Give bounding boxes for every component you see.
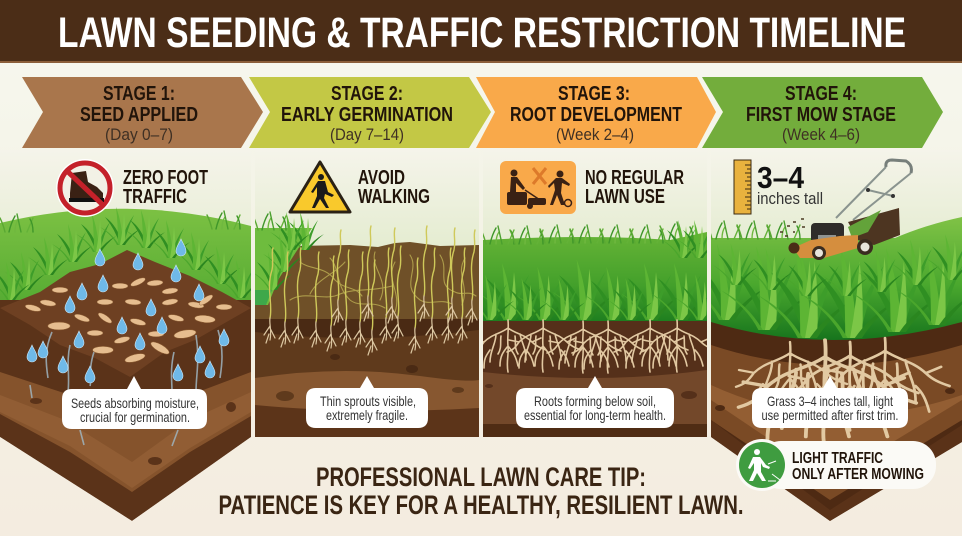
text: no regular lawn use: LAWN USE — [585, 186, 665, 208]
sprouts — [264, 226, 477, 355]
panel: stage 1 seed applied — [0, 201, 251, 521]
lawn — [483, 232, 707, 321]
soil layers — [483, 318, 707, 437]
panel: stage 2 early germination — [255, 190, 479, 437]
hill of grass — [0, 208, 251, 300]
text: professional tip — [218, 462, 744, 520]
water droplets — [27, 239, 229, 383]
badge: light traffic only after mowing: LIGHT TRAFFIC — [792, 450, 883, 467]
text: no regular lawn use — [585, 167, 684, 208]
grass tufts around soil — [0, 207, 260, 300]
lawn with hill — [711, 217, 962, 340]
grass fringe — [481, 220, 718, 258]
icon: no regular lawn use — [500, 161, 576, 214]
icon: no foot traffic sign — [56, 159, 114, 217]
stage 4 arrow header: STAGE 4: — [785, 83, 857, 105]
soil layers — [711, 315, 962, 525]
text: professional tip: PATIENCE IS KEY FOR A HEALTHY, RESILIENT LAWN. — [218, 490, 744, 520]
icon: avoid walking warning sign — [290, 162, 350, 212]
stage 2 arrow header: EARLY GERMINATION — [281, 104, 453, 126]
text: 3-4 inches tall: inches tall — [757, 189, 823, 208]
water trails — [30, 330, 222, 446]
text: avoid walking — [358, 167, 430, 208]
callout: stage 2 caption: Thin sprouts visible, — [320, 393, 416, 409]
soil layers — [255, 316, 483, 437]
callout: stage 3 caption: Roots forming below soil, — [534, 393, 656, 409]
stage 2 arrow header: (Day 7–14) — [330, 125, 404, 144]
text: 3-4 inches tall: 3–4 — [757, 160, 805, 195]
icon: ruler — [734, 160, 751, 214]
stage 2 arrow header: STAGE 2: — [331, 83, 403, 105]
text: 3-4 inches tall — [757, 160, 823, 208]
stage 2 arrow header — [249, 77, 491, 148]
callout: stage 4 caption: use permitted after first trim. — [762, 407, 898, 423]
callout: stage 1 caption: crucial for germination. — [80, 409, 190, 425]
text: avoid walking: AVOID — [358, 167, 405, 189]
stage 1 arrow header: (Day 0–7) — [105, 125, 173, 144]
text: avoid walking: WALKING — [358, 186, 430, 208]
soil block sides — [0, 300, 251, 521]
callout: stage 3 caption — [516, 376, 674, 428]
badge: light traffic only after mowing — [736, 439, 936, 491]
callout: stage 2 caption: extremely fragile. — [326, 407, 408, 423]
stage 3 arrow header — [476, 77, 716, 148]
stage 4 arrow header — [702, 77, 943, 148]
callout: stage 2 caption — [306, 376, 428, 428]
panel: stage 4 first mow stage — [711, 190, 962, 521]
soil top surface — [0, 250, 251, 377]
icon: lawn mower — [780, 160, 911, 260]
text: zero foot traffic — [123, 167, 208, 208]
callout: stage 1 caption: Seeds absorbing moisture, — [71, 395, 199, 411]
callout: stage 4 caption — [752, 376, 908, 428]
stage 3 arrow header: STAGE 3: — [558, 83, 630, 105]
text: no regular lawn use: NO REGULAR — [585, 167, 684, 189]
roots — [736, 338, 950, 449]
text: professional tip: PROFESSIONAL LAWN CARE TIP: — [316, 462, 646, 492]
text: zero foot traffic: ZERO FOOT — [123, 167, 208, 189]
roots — [472, 320, 715, 373]
left grass corner — [252, 212, 324, 305]
badge: light traffic only after mowing: ONLY AFTER MOWING — [792, 466, 924, 483]
stage 1 arrow header: SEED APPLIED — [80, 104, 198, 126]
stage 3 arrow header: (Week 2–4) — [556, 125, 634, 144]
stage 4 arrow header: (Week 4–6) — [782, 125, 860, 144]
seeds — [25, 276, 232, 364]
stage 1 arrow header: STAGE 1: — [103, 83, 175, 105]
grass blades — [685, 221, 962, 338]
upper soil with sprouts — [255, 240, 479, 319]
callout: stage 1 caption — [62, 376, 207, 429]
callout: stage 4 caption: Grass 3–4 inches tall, light — [767, 393, 893, 409]
text: zero foot traffic: TRAFFIC — [123, 186, 187, 208]
tangled sprout stems — [290, 252, 476, 312]
stage 4 arrow header: FIRST MOW STAGE — [746, 104, 896, 126]
grass tufts — [483, 262, 707, 320]
stage 1 arrow header — [22, 77, 263, 148]
callout: stage 3 caption: essential for long-term health. — [524, 407, 666, 423]
stage 3 arrow header: ROOT DEVELOPMENT — [510, 104, 682, 126]
panel: stage 3 root development — [483, 190, 707, 437]
